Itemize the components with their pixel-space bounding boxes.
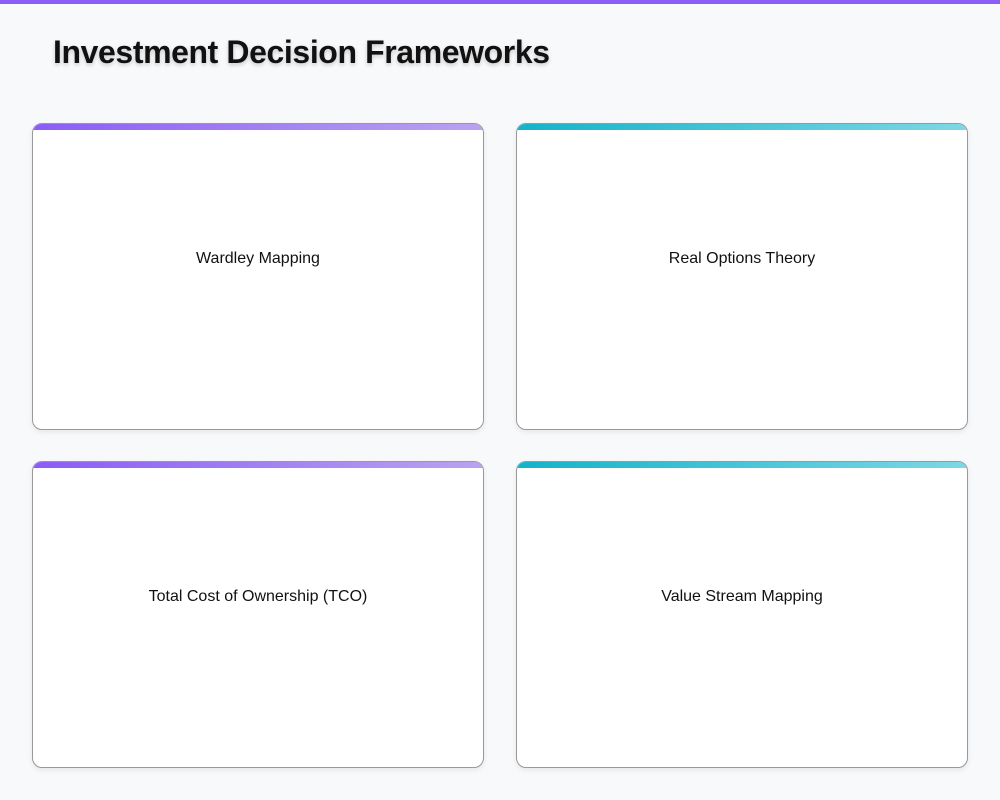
title: Investment Decision Frameworks (53, 34, 550, 70)
panel: Wardley Mapping: Wardley Mapping (196, 250, 320, 267)
panel: Real Options Theory: Real Options Theory (669, 250, 815, 267)
panel: Real Options Theory (516, 123, 968, 430)
panel: TCO: Total Cost of Ownership (TCO) (149, 588, 367, 605)
panel: Value Stream Mapping (516, 461, 968, 768)
panel: TCO (32, 461, 484, 768)
panel: Wardley Mapping (32, 123, 484, 430)
panel: Value Stream Mapping: Value Stream Mapping (661, 588, 823, 605)
